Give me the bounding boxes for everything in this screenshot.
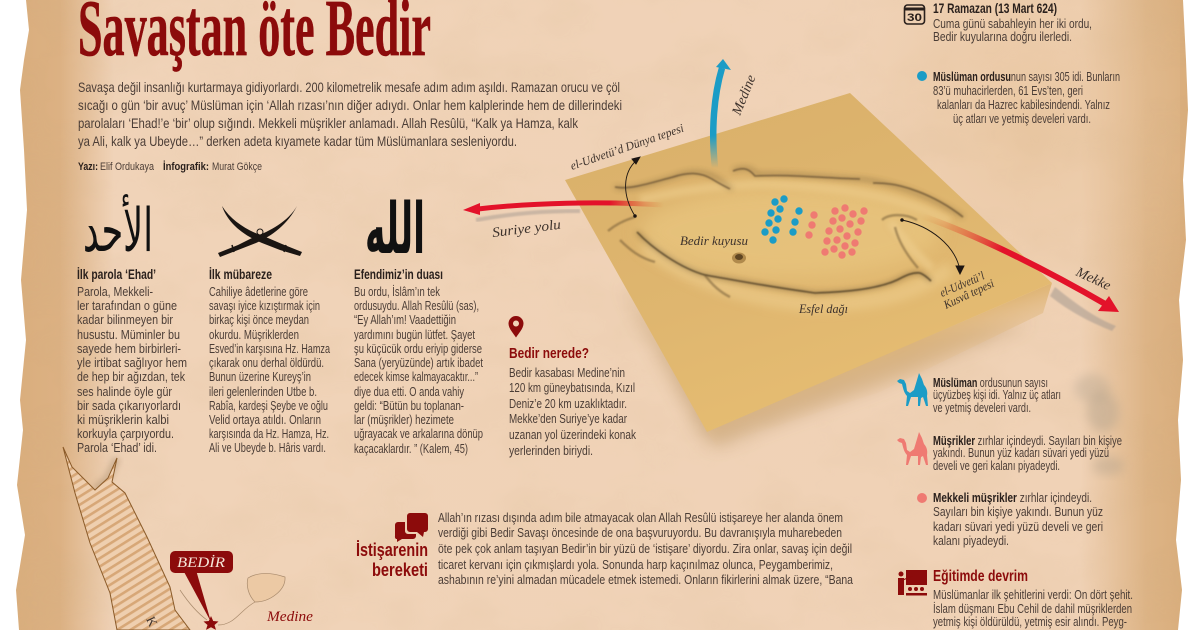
intro text: Savaşa değil insanlığı kurtarmaya gidiyorlardı. 200 kilometrelik mesafe adım adım aşıldı. Ramazan orucu ve çöl bbox=[78, 79, 620, 95]
icon: speech bubbles bbox=[395, 513, 428, 542]
text: 17 Ramazan: Bedir kuyularına doğru ilerledi. bbox=[933, 29, 1072, 44]
column: İlk mübareze: Cahiliye âdetlerine göre bbox=[209, 284, 308, 299]
byline: Elif Ordukaya bbox=[100, 161, 155, 173]
text: Müşrikler camel note: yakındı. Bunun yüz kadarı süvari yedi yüzü bbox=[933, 445, 1109, 460]
column: Efendimiz'in duası: kaçacaklardır. ” (Kalem, 45) bbox=[354, 441, 468, 456]
column: İlk parola Ehad: ler tarafından o güne bbox=[77, 298, 177, 313]
column: İlk mübareze: birkaç kişi önce meydan bbox=[209, 312, 309, 327]
text: 17 Ramazan bbox=[933, 0, 1092, 44]
icon: Allah calligraphy: الله bbox=[365, 188, 425, 270]
byline: İnfografik: bbox=[163, 160, 209, 173]
blue dots: Muslim army bbox=[761, 195, 803, 244]
byline: Yazı: bbox=[78, 161, 98, 173]
column: İlk parola Ehad: yle irtibat sağlıyor hem bbox=[77, 355, 187, 370]
map labels: Kusvâ tepesi bbox=[941, 276, 996, 312]
intro text bbox=[78, 79, 622, 149]
text: Müşrikler camel note: Müşrikler zırhlar içindeydi. Sayıları bin kişiye bbox=[933, 433, 1122, 448]
legend: Muslim army: Müslüman ordusunun sayısı 305 idi. Bunların bbox=[933, 69, 1120, 84]
column: Efendimiz'in duası: “Ey Allah’ım! Vaadettiğin bbox=[354, 312, 456, 327]
legend: Muslim army bbox=[917, 69, 1120, 126]
icon: teacher and board bbox=[898, 570, 927, 596]
text: Müslüman camel note: üçyüzbeş kişi idi. Yalnız üç atları bbox=[933, 387, 1061, 402]
text: 17 Ramazan: Cuma günü sabahleyin her iki ordu, bbox=[933, 16, 1092, 31]
icon: Ehad calligraphy: الأحد bbox=[83, 194, 153, 265]
column: Efendimiz'in duası: yardımını bugün lütfet. Şayet bbox=[354, 327, 475, 342]
column: Efendimiz'in duası: Sana (yeryüzünde) artık ibadet bbox=[354, 355, 483, 370]
text: 17 Ramazan: 17 Ramazan (13 Mart 624) bbox=[933, 0, 1057, 16]
column: Efendimiz'in duası: şu küçücük ordu eriyip giderse bbox=[354, 341, 482, 356]
intro text: sıcağı o gün ‘bir avuç’ Müslüman için ‘Allah rızası’nın diğer adıydı. Onlar hem kalplerinde hem de dillerindeki bbox=[78, 97, 622, 113]
column: Efendimiz'in duası: Efendimiz’in duası bbox=[354, 266, 443, 282]
column: Efendimiz'in duası: diye dua etti. O anda vahiy bbox=[354, 384, 464, 399]
text: Müşrikler camel note bbox=[933, 433, 1122, 473]
column: İlk parola Ehad: sayede hem birbirleri- bbox=[77, 341, 181, 356]
panel: Bedir nerede: 120 km güneybatısında, Kızıl bbox=[509, 380, 635, 395]
panel: Bedir nerede: Mekke’den Suriye’ye kadar bbox=[509, 411, 628, 426]
text: Müslüman camel note: ve yetmiş develeri vardı. bbox=[933, 400, 1031, 415]
text: Müşrikler camel note: develi ve geri kalanı piyadeydi. bbox=[933, 458, 1060, 473]
icon: red camel bbox=[897, 432, 928, 465]
map labels bbox=[491, 73, 1113, 316]
text: İstişare paragraph: verdiği gibi Bedir Savaşı öncesinde de ona başvuruyordu. Bu davranışıyla muharebeden bbox=[438, 525, 842, 540]
column: İlk mübareze: ileri gelenlerinden Utbe b. bbox=[209, 384, 317, 399]
byline: Murat Gökçe bbox=[212, 161, 262, 173]
intro text: parolaları ‘Ehad!’e ‘bir’ olup sığındı. Mekkeli müşrikler anlamadı. Allah Resûlü, “Kalk ya Hamza, kalk bbox=[78, 115, 579, 131]
icon: crossed swords bbox=[218, 206, 302, 257]
heading: İstişarenin bereketi bbox=[356, 540, 428, 580]
column: İlk mübareze: çıkarak onu derhal öldürdü. bbox=[209, 355, 324, 370]
legend: Meccan army: kalanı piyadeydi. bbox=[933, 533, 1009, 548]
column: İlk mübareze: Esved’in karşısına Hz. Hamza bbox=[209, 341, 331, 356]
column: İlk parola Ehad: ki müşriklerin kalbi bbox=[77, 412, 169, 427]
panel: Bedir nerede bbox=[509, 345, 636, 458]
text: İstişare paragraph: öte pek çok anlam taşıyan Bedir’in bir yüzü de ‘istişare’ diyordu. Zira onlar, savaş için değil bbox=[438, 541, 852, 556]
heading: İstişarenin bereketi: İstişarenin bbox=[356, 540, 428, 560]
column: İlk mübareze: İlk mübareze bbox=[209, 266, 272, 282]
intro text: ya Ali, kalk ya Ubeyde…” derken adeta kıyamete kadar tüm Müslümanlara sesleniyordu. bbox=[78, 133, 517, 149]
arrow: Suriye yolu bbox=[463, 203, 664, 220]
map labels: el-Udvetü’d Dünya tepesi bbox=[568, 121, 685, 173]
panel: Eğitimde devrim bbox=[933, 568, 1133, 629]
column: İlk parola Ehad: bir sada çıkarıyorlardı bbox=[77, 398, 181, 413]
mini map bbox=[63, 447, 313, 630]
text: İstişare paragraph: Allah’ın rızası dışında adım bile atmayacak olan Allah Resûlü istişareye her alanda önem bbox=[438, 510, 843, 525]
panel: Bedir nerede: Deniz’e 20 km uzaklıktadır. bbox=[509, 396, 627, 411]
column: İlk parola Ehad: korkuyla çarpıyordu. bbox=[77, 426, 174, 441]
map labels: el-Udvetü’l bbox=[938, 268, 987, 300]
legend: Meccan army bbox=[917, 490, 1103, 548]
column: İlk parola Ehad bbox=[77, 266, 187, 455]
panel: Eğitimde devrim: Müslümanlar ilk şehitlerini verdi: On dört şehit. bbox=[933, 587, 1133, 602]
column: İlk parola Ehad: de hep bir ağızdan, tek bbox=[77, 369, 185, 384]
thin pointer arrows bbox=[626, 157, 964, 274]
legend: Meccan army: kadarı süvari yedi yüzü develi ve geri bbox=[933, 519, 1103, 534]
legend: Meccan army: Sayıları bin kişiye yakındı. Bunun yüz bbox=[933, 504, 1103, 519]
column: İlk mübareze: Ali ve Ubeyde b. Hâris vardı. bbox=[209, 440, 326, 455]
panel: Eğitimde devrim: Eğitimde devrim bbox=[933, 568, 1028, 585]
column: Efendimiz'in duası: geldi: “Bütün bu toplanan- bbox=[354, 398, 464, 413]
column: İlk parola Ehad: Parola ‘Ehad’ idi. bbox=[77, 440, 157, 455]
map labels: Suriye yolu bbox=[491, 218, 562, 241]
panel: Bedir nerede: uzanan yol üzerindeki konak bbox=[509, 427, 636, 442]
column: Efendimiz'in duası bbox=[354, 266, 483, 456]
panel: Bedir nerede: Bedir nerede? bbox=[509, 345, 589, 362]
column: İlk mübareze bbox=[209, 266, 331, 455]
panel: Eğitimde devrim: İslam düşmanı Ebu Cehil de dahil müşriklerden bbox=[933, 601, 1132, 616]
mini map: BEDİR bbox=[177, 555, 225, 571]
3D terrain block bbox=[565, 93, 1052, 446]
column: İlk parola Ehad: kadar bilinmeyen bir bbox=[77, 312, 174, 327]
map labels: Esfel dağı bbox=[798, 301, 848, 316]
icon: calendar bbox=[904, 5, 924, 24]
column: İlk parola Ehad: İlk parola ‘Ehad’ bbox=[77, 266, 156, 282]
icon: calendar: 30 bbox=[907, 12, 922, 24]
column: Efendimiz'in duası: uğrayacak ve arkalarına dönüp bbox=[354, 426, 483, 441]
column: İlk parola Ehad: husustu. Müminler bu bbox=[77, 327, 180, 342]
column: İlk mübareze: Rabîa, kardeşi Şeybe ve oğlu bbox=[209, 398, 328, 413]
legend: Muslim army: kalanları da Hazrec kabilesindendi. Yalnız bbox=[937, 97, 1110, 112]
legend: Muslim army: üç atları ve yetmiş develeri vardı. bbox=[953, 111, 1091, 126]
heading: İstişarenin bereketi: bereketi bbox=[372, 560, 428, 580]
icon: location pin bbox=[508, 316, 524, 338]
red dots: Meccan army bbox=[805, 204, 868, 259]
map labels: Bedir kuyusu bbox=[680, 233, 748, 248]
icon: blue camel bbox=[897, 373, 928, 406]
column: İlk mübareze: Bunun üzerine Kureyş’in bbox=[209, 369, 311, 384]
arrow: Mekke bbox=[922, 216, 1119, 331]
panel: Bedir nerede: Bedir kasabası Medine’nin bbox=[509, 365, 625, 380]
mini map: Medine bbox=[266, 609, 313, 625]
text: Müslüman camel note bbox=[933, 375, 1061, 415]
panel: Eğitimde devrim: yetmiş kişi öldürüldü, yetmiş esir alındı. Peyg- bbox=[933, 614, 1127, 629]
mini map: K bbox=[143, 614, 161, 629]
column: İlk parola Ehad: Parola, Mekkeli- bbox=[77, 284, 153, 299]
column: İlk mübareze: Velid ortaya atıldı. Onların bbox=[209, 412, 321, 427]
column: Efendimiz'in duası: lar (müşrikler) hezimete bbox=[354, 412, 454, 427]
column: İlk parola Ehad: ses halinde öyle gür bbox=[77, 384, 173, 399]
legend: Muslim army: 83’ü muhacirlerden, 61 Evs’ten, geri bbox=[933, 83, 1083, 98]
column: İlk mübareze: savaşı iyice kızıştırmak için bbox=[209, 298, 320, 313]
column: Efendimiz'in duası: ordusuydu. Allah Resûlü (sas), bbox=[354, 298, 479, 313]
column: Efendimiz'in duası: Bu ordu, İslâm’ın tek bbox=[354, 284, 440, 299]
column: Efendimiz'in duası: edecek kimse kalmayacaktır...” bbox=[354, 369, 478, 384]
map labels: Mekke bbox=[1072, 265, 1113, 294]
column: İlk mübareze: okurdu. Müşriklerden bbox=[209, 327, 299, 342]
column: İlk mübareze: karşısında da Hz. Hamza, Hz. bbox=[209, 426, 329, 441]
map labels: Medine bbox=[729, 73, 759, 118]
text: İstişare paragraph: ticaret kervanı için çıkmışlardı yola. Sonunda harp kaçınılmaz olunca, Peygamberimiz, bbox=[438, 557, 833, 572]
text: İstişare paragraph bbox=[438, 510, 854, 587]
well bbox=[732, 252, 746, 264]
text: İstişare paragraph: ashabının re’yini almadan mücadele etmek istemedi. Onların fikirlerini almak üzere, “Bana bbox=[438, 572, 854, 587]
byline bbox=[78, 160, 262, 173]
arrow: Medine bbox=[713, 59, 731, 168]
legend: Meccan army: Mekkeli müşrikler zırhlar içindeydi. bbox=[933, 490, 1092, 505]
panel: Bedir nerede: yerlerinden biriydi. bbox=[509, 443, 593, 458]
text: Müslüman camel note: Müslüman ordusunun sayısı bbox=[933, 375, 1048, 390]
